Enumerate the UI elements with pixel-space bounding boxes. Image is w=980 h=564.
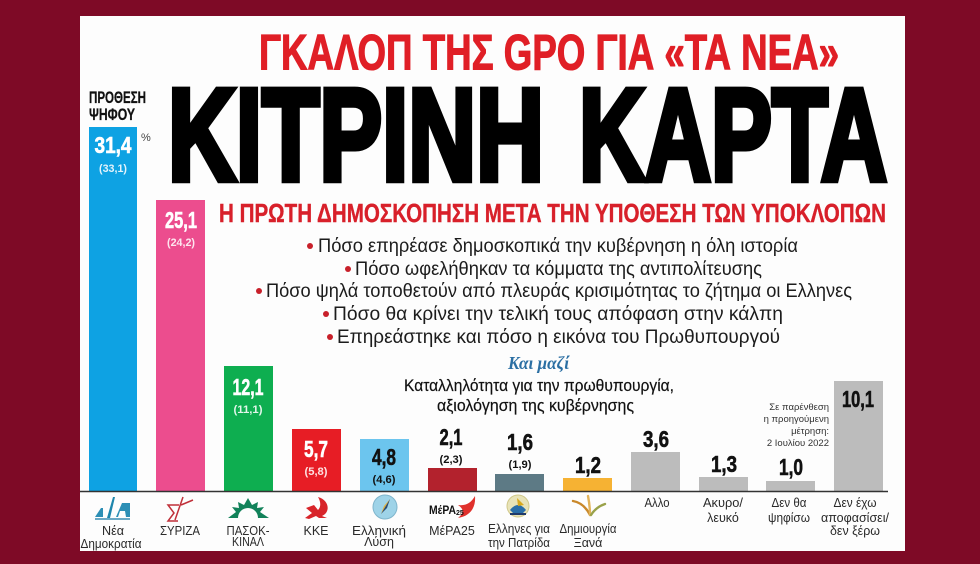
party labels: Ακυρο/ [703,496,744,510]
supplement note [404,353,674,415]
bar: ΜέΡΑ25: 2,1 [440,424,463,450]
percent sign: % [141,132,151,144]
bar: Ελληνες για την Πατρίδα: (1,9) [508,459,532,471]
bullet list: Πόσο ωφελήθηκαν τα κόμματα της αντιπολίτευσης [355,259,762,280]
party labels: Λύση [364,535,394,549]
bar: ΠΑΣΟΚ-ΚΙΝΑΛ: 12,1 [232,374,264,400]
icon: Ελληνες για την Πατρίδα logo [507,495,529,517]
bar: ΠΑΣΟΚ-ΚΙΝΑΛ: (11,1) [234,404,263,416]
party labels: Ελληνες για [488,522,550,536]
bar: ΣΥΡΙΖΑ: (24,2) [167,237,195,249]
bar: ΚΚΕ: (5,8) [304,466,328,478]
party labels: Δεν έχω [834,496,877,510]
icon: ΜέΡΑ25 logo [429,496,475,518]
party labels: Δημιουργία [560,522,616,536]
bar: Δημιουργία Ξανά [563,452,612,491]
party labels: ΣΥΡΙΖΑ [160,524,201,538]
note on previous measurement: 2 Ιουλίου 2022 [767,438,829,449]
bullet list: Πόσο ψηλά τοποθετούν από πλευράς κρισιμότητας το ζήτημα οι Ελληνες [266,281,852,302]
bar: Ελληνες για την Πατρίδα: 1,6 [507,429,533,455]
bar: Δεν θα ψηφίσω: 1,0 [779,454,803,480]
note on previous measurement [764,402,829,449]
bullet list: Επηρεάστηκε και πόσο η εικόνα του Πρωθυπουργού [337,327,780,348]
chart label [89,88,146,124]
bar: Νέα Δημοκρατία: (33,1) [99,163,127,175]
icon: ΜέΡΑ25 logo: ΜέΡΑ [429,503,456,517]
icon: ΚΚΕ hammer and sickle [305,497,328,519]
bar: Νέα Δημοκρατία [89,127,137,491]
note on previous measurement: μέτρηση: [791,426,829,437]
supplement note: Καταλληλότητα για την πρωθυπουργία, [404,376,674,395]
bar: Αλλο [631,426,680,491]
bar chart [80,127,888,492]
party labels: ΚΙΝΑΛ [232,535,265,549]
bar: Ακυρο/λευκό: 1,3 [711,451,737,477]
bar: Δεν έχω αποφασίσει [834,381,883,491]
bar: Ελληνική Λύση: (4,6) [372,474,396,486]
supplement note: Και μαζί [507,353,570,373]
party labels: την Πατρίδα [488,536,550,550]
party labels: αποφασίσει/ [821,511,890,525]
bar: Δεν έχω αποφασίσει: 10,1 [842,386,874,412]
icon: ΜέΡΑ25 logo: 25 [456,510,464,517]
bar: Ακυρο/λευκό [699,451,748,491]
icon: ΣΥΡΙΖΑ logo [168,497,193,521]
bar: Δημιουργία Ξανά: 1,2 [575,452,601,478]
bar: ΣΥΡΙΖΑ: 25,1 [165,207,197,233]
bar: ΚΚΕ [292,429,341,491]
supplement note: αξιολόγηση της κυβέρνησης [437,396,634,415]
chart label: ΨΗΦΟΥ [89,105,135,124]
bar: Νέα Δημοκρατία: 31,4 [94,132,132,158]
party labels: Ελληνική [352,524,406,538]
party labels: Δημοκρατία [80,537,142,551]
icon: Ελληνική Λύση emblem [373,495,397,519]
bullet list: Πόσο επηρέασε δημοσκοπικά την κυβέρνηση η όλη ιστορία [318,236,798,257]
bar: Αλλο: 3,6 [643,426,669,452]
bar: ΣΥΡΙΖΑ [156,200,205,491]
bar: ΜέΡΑ25 [428,424,477,491]
bar: Ελληνες για την Πατρίδα [495,429,544,491]
bar: ΚΚΕ: 5,7 [304,436,328,462]
bar: Ελληνική Λύση: 4,8 [372,444,396,470]
party labels [80,496,890,551]
bar: Ελληνική Λύση [360,439,409,491]
bar: Δεν θα ψηφίσω [766,454,815,491]
chart label: ΠΡΟΘΕΣΗ [89,88,146,107]
party labels: λευκό [707,511,739,525]
icon: ΠΑΣΟΚ sun [228,498,269,518]
party labels: Νέα [102,524,124,538]
party labels: ψηφίσω [768,511,810,525]
icon: Νέα Δημοκρατία logo [95,497,130,520]
bar: ΜέΡΑ25: (2,3) [440,454,463,466]
bullet list: Πόσο θα κρίνει την τελική τους απόφαση στην κάλπη [333,304,783,325]
note on previous measurement: Σε παρένθεση [769,402,829,413]
party labels: ΠΑΣΟΚ- [226,524,270,538]
bar: ΠΑΣΟΚ-ΚΙΝΑΛ [224,366,273,491]
party labels: ΚΚΕ [303,524,329,538]
party labels: δεν ξέρω [830,524,880,538]
party labels: Δεν θα [772,496,806,510]
party labels: Αλλο [644,496,670,510]
party labels: Ξανά [574,536,602,550]
party labels: ΜέΡΑ25 [429,524,475,538]
note on previous measurement: η προηγούμενη [764,414,829,425]
white panel [80,16,905,551]
bullet list [256,236,852,348]
icon: Δημιουργία Ξανά logo [573,496,605,515]
